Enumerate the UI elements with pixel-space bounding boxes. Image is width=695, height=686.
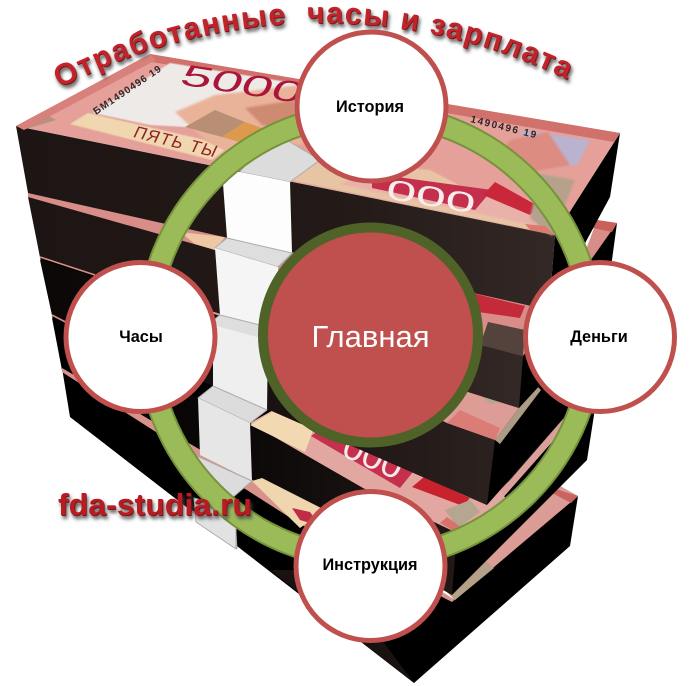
node: История: История xyxy=(336,98,404,116)
node: Инструкция: Инструкция xyxy=(322,556,418,574)
black side face xyxy=(549,133,620,310)
central circle: Главная: Главная xyxy=(312,319,430,354)
node: Часы: Часы xyxy=(119,328,163,346)
serial number left: БМ1490496 19 xyxy=(92,63,164,117)
third brick xyxy=(40,255,600,505)
node: Инструкция xyxy=(296,492,445,640)
banknote wording: ПЯТЬ ТЫ xyxy=(132,122,220,162)
banknote value right: 000: 000 xyxy=(384,173,478,220)
top brick xyxy=(16,54,620,310)
front face xyxy=(16,126,555,310)
node: Деньги xyxy=(526,262,674,412)
fourth brick xyxy=(52,315,594,595)
paper wrapper bands xyxy=(190,130,320,549)
green ring connector xyxy=(148,114,592,558)
node: История xyxy=(297,32,446,181)
second brick xyxy=(28,193,617,408)
central circle: Главная xyxy=(263,228,478,442)
node: Деньги: Деньги xyxy=(570,328,628,346)
bottom brick xyxy=(62,366,578,683)
money stack xyxy=(16,54,620,683)
node: Часы xyxy=(66,262,215,412)
site watermark: fda-studia.ru xyxy=(58,487,252,522)
banknote value: 000: 000 xyxy=(337,428,409,488)
banknote top face xyxy=(16,54,620,236)
banknote value left: 5000: 5000 xyxy=(175,59,310,110)
serial number right: 1490496 19 xyxy=(469,114,539,142)
